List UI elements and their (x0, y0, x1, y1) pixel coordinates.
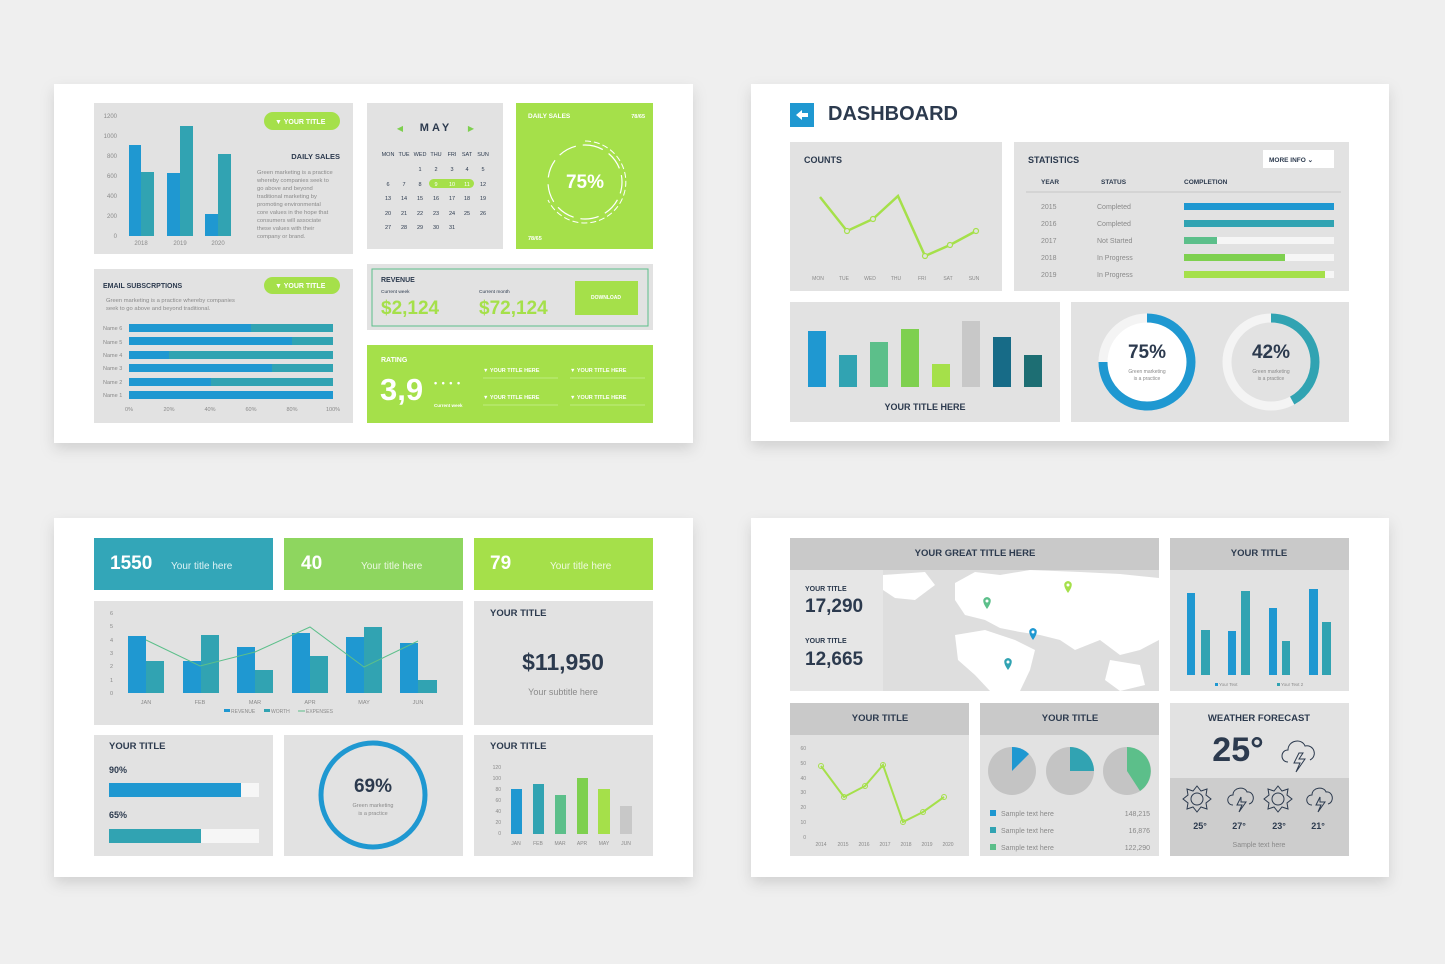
panel: monthly bars: 100 (493, 776, 501, 782)
panel: email subscriptions: ▼ YOUR TITLE (275, 283, 326, 290)
panel: daily sales bar chart: company or brand. (257, 234, 306, 240)
panel: counts line chart: TUE (839, 276, 850, 282)
panel: combo bar line chart: 4 (110, 638, 113, 644)
tile: 79: Your title here (550, 561, 612, 572)
panel: donut charts: 75% (1128, 342, 1166, 363)
panel: weather forecast: 21° (1311, 821, 1325, 831)
panel: statistics table: YEAR (1041, 179, 1059, 186)
panel: weather forecast: 25° (1212, 731, 1264, 769)
panel: email subscriptions: 40% (204, 407, 216, 413)
panel: grouped bars: Your Text (1219, 682, 1238, 687)
card: top-right dashboard (751, 84, 1389, 441)
panel: email subscriptions: Name 5 (103, 340, 122, 346)
button: more info: MORE INFO ⌄ (1269, 157, 1313, 164)
panel: daily sales bar chart: 2018 (134, 241, 148, 247)
panel: combo bar line chart: APR (304, 700, 316, 706)
panel: line chart: 2017 (879, 842, 891, 848)
panel: statistics table: 2016 (1041, 221, 1057, 228)
card: bottom-right dashboard (751, 518, 1389, 877)
panel: email subscriptions: EMAIL SUBSCRPTIONS (103, 283, 183, 290)
panel: calendar: 16 (433, 196, 439, 202)
panel: daily sales gauge: 78/65 (528, 236, 542, 242)
panel: calendar: 6 (386, 182, 390, 188)
panel: calendar: FRI (448, 152, 457, 158)
panel: daily sales bar chart: traditional marketing by (257, 194, 317, 200)
panel: weather forecast (1170, 703, 1349, 856)
panel: combo bar line chart: EXPENSES (306, 709, 334, 715)
panel: line chart: YOUR TITLE (852, 713, 908, 724)
panel: monthly bars: 40 (495, 809, 501, 815)
panel: statistics table: 2019 (1041, 272, 1057, 279)
panel: bar chart your title here: YOUR TITLE HERE (884, 402, 966, 412)
panel: daily sales bar chart: consumers will associate (257, 218, 321, 224)
tile: 1550: Your title here (171, 561, 233, 572)
panel: combo bar line chart: REVENUE (231, 709, 256, 715)
panel: monthly bars: JAN (511, 841, 521, 847)
panel: email subscriptions: Name 6 (103, 326, 122, 332)
panel: email subscriptions: Name 3 (103, 366, 122, 372)
panel: statistics table: 2018 (1041, 255, 1057, 262)
tile: 40: Your title here (361, 561, 423, 572)
panel: combo bar line chart: JAN (141, 700, 151, 706)
panel: line chart (790, 703, 969, 856)
panel: rating: • • • • (434, 378, 461, 388)
icons: forecast (1183, 786, 1332, 812)
panel: donut charts: Green marketing (1252, 369, 1290, 375)
panel: calendar: 7 (402, 182, 406, 188)
panel: calendar: ◀ (397, 124, 404, 133)
panel: calendar: 22 (417, 211, 423, 217)
panel: grouped bars: YOUR TITLE (1231, 548, 1287, 559)
panel: calendar: 1 (418, 167, 422, 173)
panel: daily sales bar chart: whereby companies seek to (256, 178, 329, 184)
panel: email subscriptions: seek to go above and beyond traditional. (106, 306, 211, 312)
panel: combo bar line chart: WORTH (271, 709, 290, 715)
panel: $11,950: YOUR TITLE (490, 608, 546, 619)
panel: progress bars (94, 735, 273, 856)
panel: line chart: 60 (800, 746, 806, 752)
panel: combo bar line chart: 3 (110, 651, 113, 657)
panel: bar chart your title here (790, 302, 1060, 422)
panel: world map: 12,665 (805, 649, 864, 670)
panel: revenue: $2,124 (381, 298, 440, 319)
panel: calendar: 25 (464, 211, 470, 217)
icon: back arrow (790, 103, 814, 127)
panel: calendar: WED (414, 152, 426, 158)
panel: combo bar line chart: MAY (358, 700, 370, 706)
panel: pie charts: YOUR TITLE (1042, 713, 1098, 724)
tile: 40 (284, 538, 463, 590)
panel: monthly bars: MAR (554, 841, 566, 847)
panel: calendar: MAY (420, 122, 452, 134)
panel: calendar: 19 (480, 196, 486, 202)
panel: daily sales gauge: 75% (566, 172, 604, 193)
panel: monthly bars: JUN (621, 841, 631, 847)
panel: calendar: 15 (417, 196, 423, 202)
panel: pie charts: 16,876 (1129, 828, 1150, 835)
panel: weather forecast: Sample text here (1233, 842, 1286, 849)
panel: combo bar line chart: 0 (110, 691, 113, 697)
tile: 79: 79 (490, 553, 511, 574)
panel: world map: YOUR TITLE (805, 586, 847, 593)
panel: calendar: THU (430, 152, 442, 158)
panel: statistics table: Not Started (1097, 238, 1133, 245)
panel: calendar: 3 (450, 167, 454, 173)
panel: weather forecast: 27° (1232, 821, 1246, 831)
panel: daily sales bar chart: go above and beyond (257, 186, 313, 192)
panel: counts line chart: SAT (943, 276, 953, 282)
panel: calendar: 30 (433, 225, 439, 231)
panel: daily sales bar chart: 200 (107, 214, 118, 220)
panel: daily sales bar chart: DAILY SALES (291, 152, 340, 161)
panel: calendar: SAT (462, 152, 473, 158)
panel: combo bar line chart: JUN (413, 700, 423, 706)
panel: counts line chart: MON (812, 276, 824, 282)
panel: revenue: $72,124 (479, 298, 548, 319)
panel: calendar: 2 (434, 167, 438, 173)
panel: 69% donut: 69% (354, 776, 392, 797)
panel: counts line chart (790, 142, 1002, 291)
panel: line chart: 2014 (815, 842, 827, 848)
panel: email subscriptions (94, 269, 353, 423)
panel: daily sales gauge: 78/65 (631, 114, 645, 120)
panel: combo bar line chart: 6 (110, 611, 113, 617)
panel: calendar: 27 (385, 225, 391, 231)
panel: combo bar line chart: MAR (249, 700, 261, 706)
panel: statistics table: Completed (1097, 204, 1131, 211)
panel: calendar: 9 (434, 182, 438, 188)
panel: donut charts: 42% (1252, 342, 1290, 363)
panel: line chart: 2019 (921, 842, 933, 848)
panel: daily sales bar chart: 2019 (173, 241, 187, 247)
panel: rating: 3,9 (380, 372, 423, 407)
panel: weather forecast: WEATHER FORECAST (1208, 713, 1310, 724)
panel: calendar: SUN (477, 152, 489, 158)
panel: monthly bars: 80 (495, 787, 501, 793)
panel: 69% donut (284, 735, 463, 856)
panel: calendar: MON (382, 152, 394, 158)
panel: calendar: 4 (465, 167, 469, 173)
tile: 1550 (94, 538, 273, 590)
panel: line chart: 2015 (837, 842, 849, 848)
panel: statistics table: Completed (1097, 221, 1131, 228)
panel: monthly bars: 60 (495, 798, 501, 804)
pill: your title (264, 112, 340, 130)
panel: revenue: REVENUE (381, 277, 415, 284)
panel: monthly bars (474, 735, 653, 856)
button: download (575, 281, 638, 315)
panel: line chart: 30 (800, 790, 806, 796)
panel: monthly bars: 120 (493, 765, 501, 771)
panel: daily sales bar chart: Green marketing is a practice (257, 170, 333, 176)
panel: combo bar line chart (94, 601, 463, 725)
panel: line chart: 2020 (942, 842, 954, 848)
panel: daily sales bar chart: 2020 (211, 241, 225, 247)
panel: email subscriptions: Name 4 (103, 353, 122, 359)
panel: calendar: 23 (433, 211, 439, 217)
panel: progress bars: YOUR TITLE (109, 741, 165, 752)
panel: statistics table: 2017 (1041, 238, 1057, 245)
panel: rating: ▼ YOUR TITLE HERE (483, 395, 540, 401)
panel: line chart: 50 (800, 761, 806, 767)
panel: email subscriptions: 60% (245, 407, 257, 413)
panel: combo bar line chart: 2 (110, 664, 113, 670)
panel: daily sales bar chart (94, 103, 353, 254)
panel: email subscriptions: 0% (125, 407, 133, 413)
panel: donut charts (1071, 302, 1349, 422)
panel: donut charts: is a practice (1258, 376, 1285, 382)
panel: daily sales bar chart: these values with their (257, 226, 314, 232)
panel: statistics table: 2015 (1041, 204, 1057, 211)
panel: statistics table: STATISTICS (1028, 155, 1079, 165)
tile: 1550: 1550 (110, 553, 152, 574)
panel: line chart: 40 (800, 776, 806, 782)
panel: line chart: 20 (800, 805, 806, 811)
panel: calendar: 26 (480, 211, 486, 217)
panel: calendar: 17 (449, 196, 455, 202)
panel: grouped bars: Your Text 2 (1281, 682, 1304, 687)
panel: grouped bars (1170, 538, 1349, 691)
panel: statistics table (1014, 142, 1349, 291)
panel: daily sales bar chart: 800 (107, 154, 118, 160)
panel: pie charts: Sample text here (1001, 845, 1054, 852)
panel: calendar: 11 (464, 182, 470, 188)
panel: combo bar line chart: 5 (110, 624, 113, 630)
panel: calendar: 10 (449, 182, 455, 188)
panel: combo bar line chart: 1 (110, 678, 113, 684)
panel: calendar (367, 103, 503, 249)
button: download: DOWNLOAD (591, 295, 621, 301)
panel: statistics table: STATUS (1101, 179, 1127, 186)
panel: email subscriptions: 80% (286, 407, 298, 413)
panel: pie charts: Sample text here (1001, 828, 1054, 835)
panel: daily sales bar chart: 400 (107, 194, 118, 200)
panel: statistics table: In Progress (1097, 272, 1133, 279)
panel: calendar: ▶ (468, 124, 475, 133)
panel: monthly bars: 20 (495, 820, 501, 826)
panel: 69% donut: is a practice (358, 811, 388, 817)
card: top-left dashboard (54, 84, 693, 443)
panel: monthly bars: MAY (599, 841, 610, 847)
panel: calendar: 14 (401, 196, 407, 202)
panel: $11,950: $11,950 (522, 649, 604, 675)
panel: line chart: 2016 (858, 842, 870, 848)
panel: monthly bars: APR (577, 841, 588, 847)
panel: weather forecast: 25° (1193, 821, 1207, 831)
panel: rating: ▼ YOUR TITLE HERE (570, 395, 627, 401)
panel: calendar: 21 (401, 211, 407, 217)
panel: calendar: 18 (464, 196, 470, 202)
panel: daily sales bar chart: 0 (114, 234, 118, 240)
panel: monthly bars: YOUR TITLE (490, 741, 546, 752)
panel: counts line chart: COUNTS (804, 155, 842, 165)
panel: pie charts: 122,290 (1125, 845, 1150, 852)
panel: pie charts: 148,215 (1125, 811, 1150, 818)
panel: daily sales gauge: DAILY SALES (528, 113, 571, 120)
panel: calendar: 5 (481, 167, 485, 173)
panel: world map (790, 538, 1159, 691)
panel: rating: ▼ YOUR TITLE HERE (570, 368, 627, 374)
panel: $11,950 (474, 601, 653, 725)
panel: daily sales gauge (516, 103, 653, 249)
icon: storm cloud (1282, 741, 1314, 772)
panel: $11,950: Your subtitle here (528, 687, 598, 697)
panel: calendar: 12 (480, 182, 486, 188)
panel: daily sales bar chart: 1200 (104, 114, 118, 120)
panel: statistics table: In Progress (1097, 255, 1133, 262)
panel: email subscriptions: Green marketing is a practice whereby companies (106, 298, 235, 304)
panel: progress bars: 65% (109, 810, 127, 820)
panel: line chart: 2018 (900, 842, 912, 848)
panel: calendar: TUE (398, 152, 410, 158)
panel: calendar: 28 (401, 225, 407, 231)
panel: revenue (367, 264, 653, 330)
panel: email subscriptions: 20% (163, 407, 175, 413)
panel: counts line chart: SUN (969, 276, 980, 282)
tile: 40: 40 (301, 553, 322, 574)
card: bottom-left dashboard (54, 518, 693, 877)
panel: monthly bars: FEB (533, 841, 544, 847)
panel: calendar: 13 (385, 196, 391, 202)
panel: world map: YOUR TITLE (805, 638, 847, 645)
panel: donut charts: Green marketing (1128, 369, 1166, 375)
panel: weather forecast: 23° (1272, 821, 1286, 831)
panel: counts line chart: WED (864, 276, 876, 282)
panel: world map: YOUR GREAT TITLE HERE (915, 548, 1035, 559)
panel: revenue: Current month (479, 289, 510, 295)
panel: statistics table: COMPLETION (1184, 179, 1228, 186)
panel: combo bar line chart: FEB (195, 700, 206, 706)
panel: daily sales bar chart: 600 (107, 174, 118, 180)
panel: donut charts: is a practice (1134, 376, 1161, 382)
panel: daily sales bar chart: 1000 (104, 134, 118, 140)
panel: world map: 17,290 (805, 596, 863, 617)
panel: calendar: 31 (449, 225, 455, 231)
button: more info (1263, 150, 1334, 168)
heading: dashboard: DASHBOARD (828, 103, 958, 125)
panel: calendar: 20 (385, 211, 391, 217)
panel: revenue: Current week (381, 289, 410, 295)
panel: email subscriptions: Name 2 (103, 380, 122, 386)
panel: monthly bars: 0 (498, 831, 501, 837)
panel: pie charts: Sample text here (1001, 811, 1054, 818)
panel: rating: Current week (434, 403, 463, 408)
panel: line chart: 0 (803, 835, 806, 841)
panel: 69% donut: Green marketing (353, 803, 393, 809)
panel: line chart: 10 (800, 820, 806, 826)
panel: email subscriptions: 100% (326, 407, 340, 413)
tile: 79 (474, 538, 653, 590)
panel: calendar: 29 (417, 225, 423, 231)
panel: rating (367, 345, 653, 423)
panel: rating: ▼ YOUR TITLE HERE (483, 368, 540, 374)
panel: rating: RATING (381, 357, 408, 364)
panel: calendar: 8 (418, 182, 422, 188)
panel: counts line chart: FRI (918, 276, 926, 282)
pill: your title: ▼ YOUR TITLE (275, 119, 326, 126)
icon: pins (983, 581, 1072, 670)
panel: daily sales bar chart: promoting environmental (257, 202, 321, 208)
panel: daily sales bar chart: core values in the hope that (257, 210, 329, 216)
panel: pie charts (980, 703, 1159, 856)
panel: progress bars: 90% (109, 765, 127, 775)
panel: email subscriptions: Name 1 (103, 393, 122, 399)
panel: counts line chart: THU (891, 276, 902, 282)
panel: calendar: 24 (449, 211, 455, 217)
